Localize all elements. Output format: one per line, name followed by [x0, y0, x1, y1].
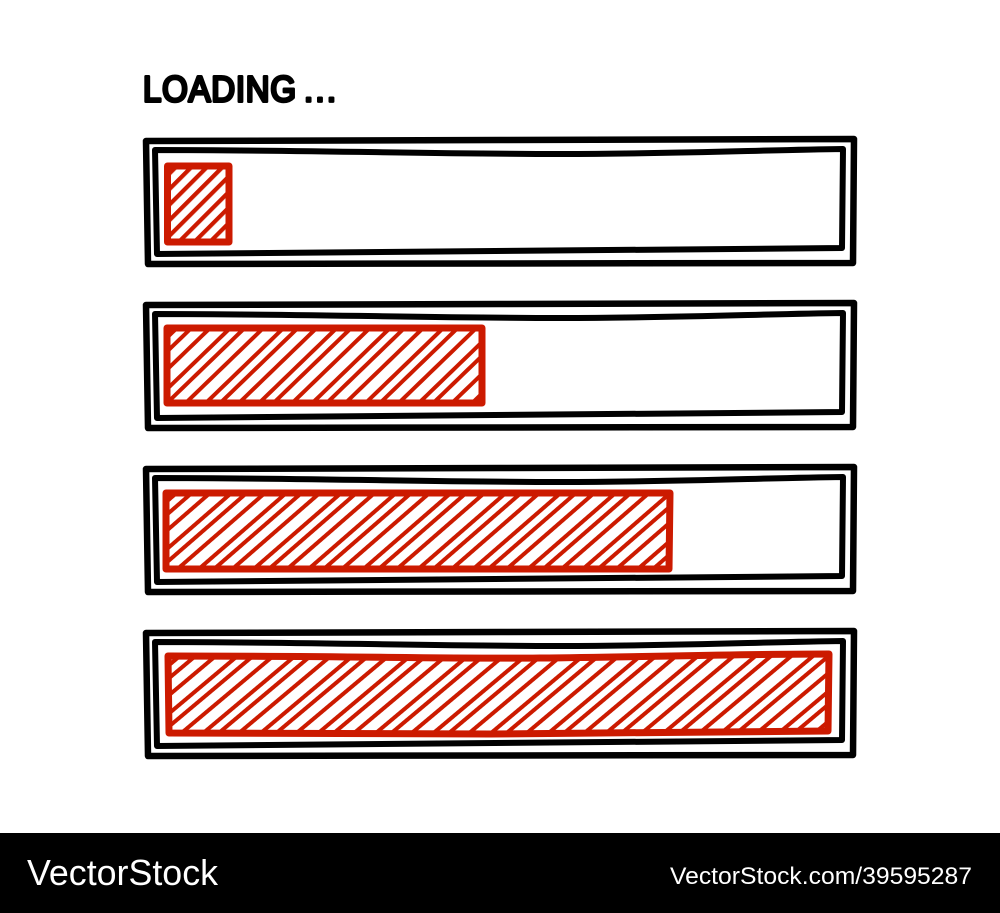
footer image id: VectorStock.com/39595287 [670, 863, 972, 890]
progress bar 3 [146, 467, 854, 592]
title: ... [304, 72, 336, 108]
title: LOADING [143, 70, 296, 110]
footer logo: VectorStock [27, 852, 219, 893]
progress bar 1 [146, 139, 854, 264]
progress bar 2 [146, 303, 854, 428]
progress bar 4 [146, 631, 854, 756]
footer bar [0, 833, 1000, 913]
